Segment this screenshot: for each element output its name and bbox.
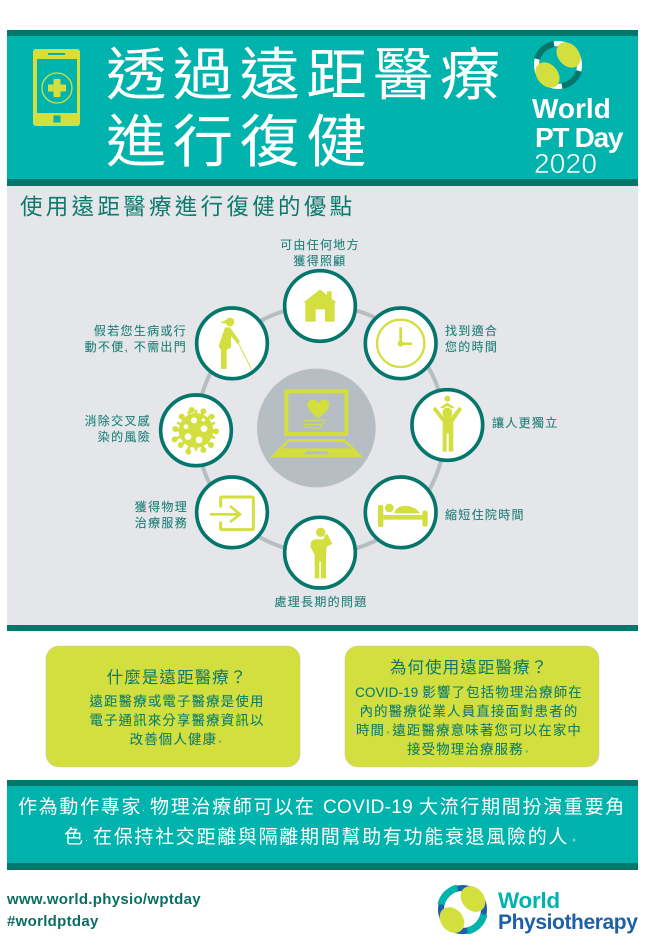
panel: what is telehealth — [46, 646, 300, 767]
panel: movement experts message — [7, 780, 638, 870]
label: eliminate cross infection: 消除交叉感 — [84, 413, 151, 428]
title: 透過遠距醫療 — [106, 44, 507, 107]
title — [106, 44, 507, 174]
label: eliminate cross infection: 染的風險 — [98, 429, 151, 444]
panel: movement experts message: · — [85, 835, 90, 845]
panel: movement experts message: COVID-19 — [323, 797, 413, 818]
title: 進行復健 — [106, 111, 373, 174]
diagram: benefits wheel — [161, 271, 483, 588]
label: long-term problems: 處理長期的問題 — [274, 594, 368, 609]
icon: older person with cane — [197, 308, 267, 379]
icon: clock — [365, 308, 436, 379]
panel: why use telehealth: 時間。遠距醫療意味著您可以在家中 — [356, 722, 582, 738]
label: care anywhere: 獲得照顧 — [293, 253, 347, 268]
logo: World Physiotherapy: World — [498, 888, 560, 913]
footer: web links — [6, 891, 201, 930]
panel: what is telehealth: 什麼是遠距醫療？ — [107, 668, 247, 687]
footer: web links: www.world.physio/wptday — [6, 891, 201, 908]
label: shorter hospital stay: 縮短住院時間 — [445, 507, 525, 522]
label: find a suitable time: 您的時間 — [445, 339, 498, 354]
panel: why use telehealth: 為何使用遠距醫療？ — [390, 658, 548, 677]
label: no need to go out: 動不便, 不需出門 — [85, 340, 187, 354]
logo: World PT Day 2020: PT Day — [535, 122, 624, 153]
panel: what is telehealth: 改善個人健康。 — [130, 731, 224, 747]
panel: movement experts message: · — [142, 805, 147, 815]
logo: World PT Day 2020: 2020 — [534, 148, 597, 179]
icon: person with neck pain — [285, 517, 355, 588]
panel: why use telehealth: 內的醫療從業人員直接面對患者的 — [360, 703, 578, 719]
label: no need to go out: 假若您生病或行 — [94, 323, 187, 338]
panel: what is telehealth: 遠距醫療或電子醫療是使用 — [89, 693, 265, 709]
icon: house — [285, 271, 355, 341]
panel: why use telehealth — [345, 646, 599, 767]
panel: header banner — [7, 30, 638, 186]
heading: benefits: 使用遠距醫療進行復健的優點 — [20, 194, 355, 220]
logo: World PT Day 2020 — [530, 38, 624, 179]
logo: World Physiotherapy — [435, 881, 638, 938]
icon: arrow into door — [197, 477, 267, 548]
icon: World Physiotherapy swirl — [435, 881, 490, 938]
icon: World PT Day swirl — [530, 38, 586, 92]
label: find a suitable time: 找到適合 — [445, 323, 498, 338]
icon: phone with medical cross — [33, 49, 80, 126]
panel: benefits of telehealth rehabilitation — [7, 186, 638, 631]
panel: what is telehealth: 電子通訊來分享醫療資訊以 — [89, 712, 265, 728]
panel: movement experts message: 色 — [64, 826, 85, 848]
icon: hospital bed — [365, 477, 436, 548]
panel: movement experts message: 。 — [570, 836, 580, 845]
label: more independent: 讓人更獨立 — [492, 415, 559, 430]
label: access to physiotherapy — [135, 499, 188, 530]
logo: World PT Day 2020: World — [532, 93, 611, 124]
panel: why use telehealth: 接受物理治療服務。 — [407, 741, 531, 757]
icon: virus — [161, 395, 231, 466]
label: eliminate cross infection — [84, 413, 151, 444]
panel: movement experts message: 在保持社交距離與隔離期間幫助有功能衰退風險的人 — [93, 826, 569, 848]
panel: movement experts message: 大流行期間扮演重要角 — [419, 796, 626, 818]
panel: why use telehealth: COVID-19 影響了包括物理治療師在 — [355, 684, 583, 700]
icon: laptop with heart in hand — [257, 369, 376, 487]
label: access to physiotherapy: 治療服務 — [135, 516, 188, 530]
footer: web links: #worldptday — [7, 913, 99, 930]
label: find a suitable time — [445, 323, 498, 354]
panel: movement experts message: 作為動作專家 — [18, 796, 142, 818]
icon: person lifting child — [412, 390, 483, 460]
label: no need to go out — [85, 323, 187, 354]
label: care anywhere: 可由任何地方 — [280, 237, 360, 252]
logo: World Physiotherapy: Physiotherapy — [498, 911, 638, 934]
label: access to physiotherapy: 獲得物理 — [135, 499, 188, 514]
panel: movement experts message: 物理治療師可以在 — [150, 796, 316, 818]
label: care anywhere — [280, 237, 360, 268]
